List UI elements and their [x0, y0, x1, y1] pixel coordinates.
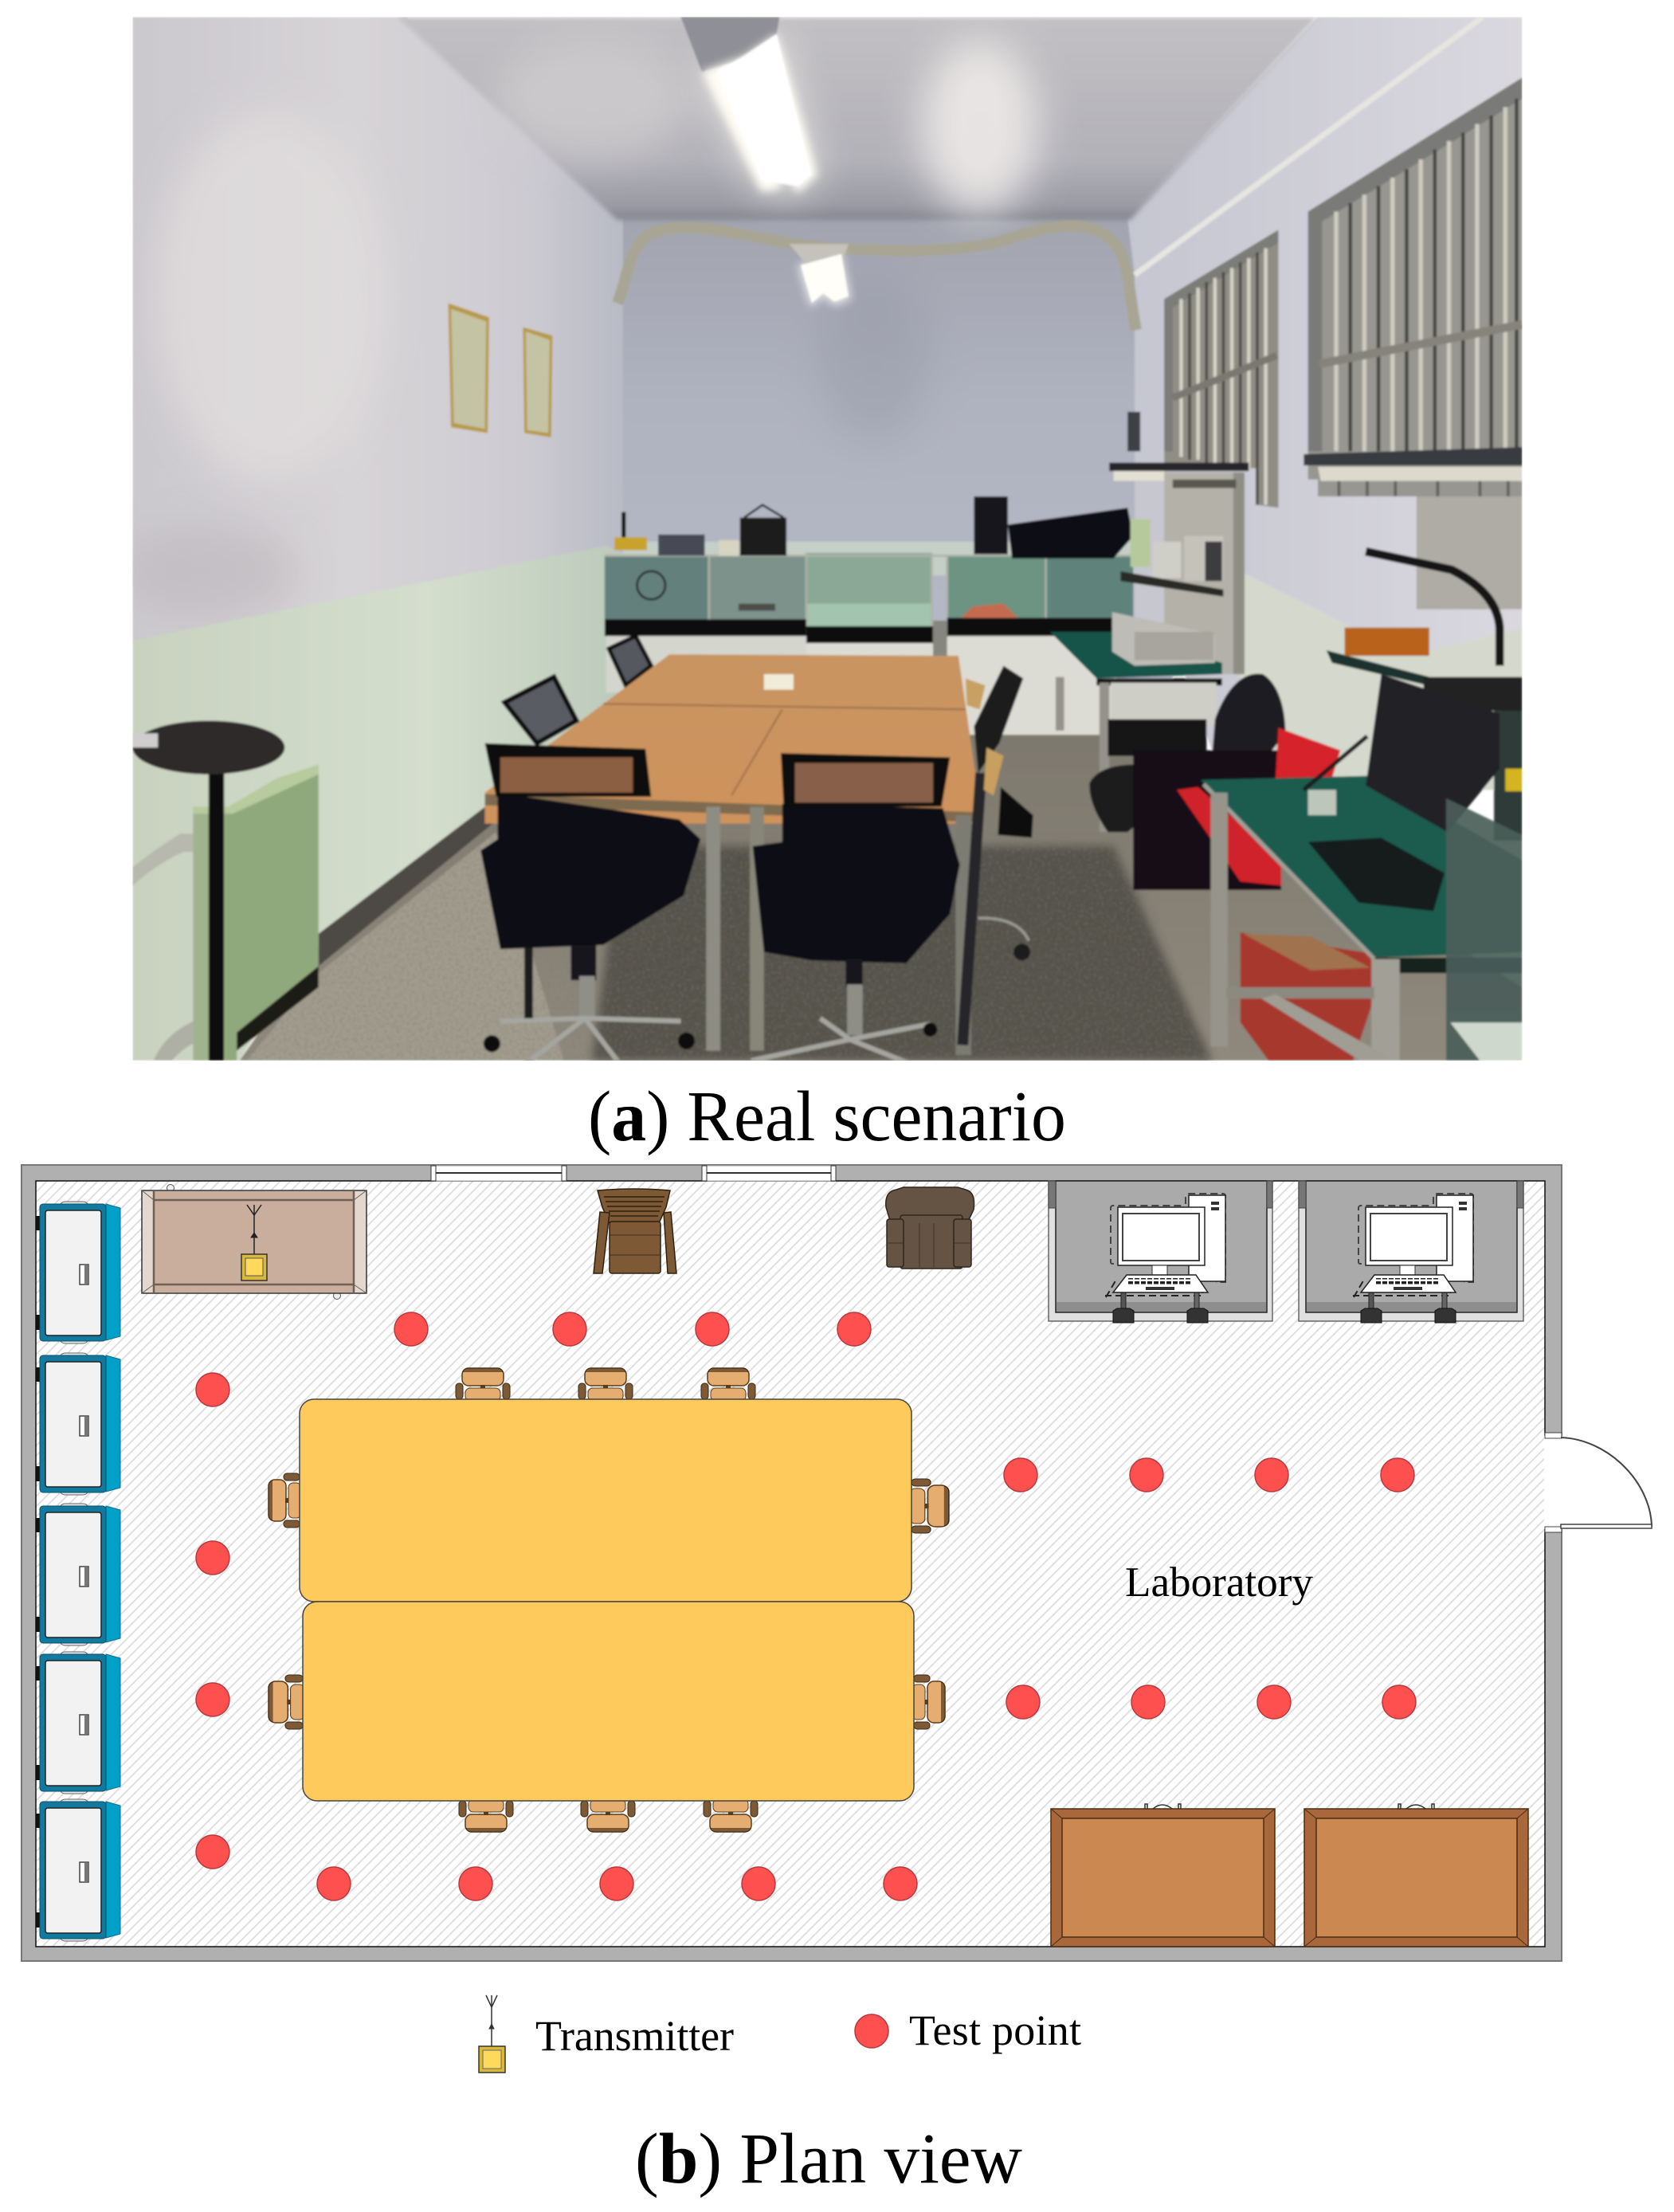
- conference table: [485, 654, 981, 1055]
- green radiator cover: [132, 764, 319, 1061]
- legend label: test point: Test point: [909, 2006, 1081, 2054]
- red chair and crate: [1177, 728, 1388, 1061]
- ceiling: [398, 17, 1318, 220]
- green workbench: [1201, 776, 1523, 1061]
- rack backdrop: [1135, 480, 1170, 663]
- glass case: [1446, 798, 1523, 1061]
- icon: transmitter: [241, 1205, 267, 1281]
- right side chair and backpack: [962, 665, 1033, 1045]
- shelf and orange device: [1327, 628, 1523, 841]
- round table: [132, 720, 284, 1061]
- fluorescent lamp near: [680, 17, 817, 193]
- computer desk 2: [1299, 1181, 1523, 1323]
- panel: plan view: [22, 1165, 1652, 1961]
- back wall: [614, 209, 1173, 694]
- brown table 1: [1051, 1804, 1275, 1947]
- back green desk: [1050, 612, 1222, 832]
- caption: plan view: (b) Plan view: [635, 2120, 1022, 2198]
- meeting chairs: [269, 1368, 949, 1832]
- caption: real scenario: (a) Real scenario: [588, 1077, 1066, 1156]
- legend icon: test point: [855, 2014, 888, 2048]
- front right chair: [751, 753, 960, 1066]
- baseboard: [319, 798, 496, 966]
- keyboard: [1308, 837, 1445, 911]
- transmitter table: [142, 1184, 367, 1299]
- front left chair: [480, 743, 700, 1066]
- rack and instruments: [1109, 463, 1249, 674]
- recliner: [886, 1187, 974, 1269]
- window 2: [1304, 77, 1523, 610]
- room walls: [22, 1165, 1562, 1961]
- left wall: [132, 17, 623, 643]
- test points: [196, 1312, 1416, 1900]
- pipe along right wall: [1135, 17, 1483, 275]
- wooden chair: [594, 1189, 676, 1273]
- legend label: transmitter: Transmitter: [535, 2012, 734, 2060]
- glass cabinets: [605, 553, 1136, 735]
- objects on cabinets: [614, 412, 1140, 559]
- door: [1544, 1433, 1652, 1532]
- legend: [479, 1995, 1081, 2073]
- floor: [240, 705, 1523, 1061]
- brown table 2: [1304, 1804, 1528, 1947]
- left wall green band: [132, 546, 623, 1061]
- cable trunking: [617, 226, 1136, 330]
- panel: real scenario photo: [127, 17, 1523, 1066]
- yellow part and cables: [1304, 736, 1523, 815]
- lamp: [1366, 551, 1500, 665]
- black armchair: [1089, 673, 1285, 890]
- fluorescent lamp far: [790, 244, 851, 308]
- right wall: [1127, 17, 1523, 790]
- legend icon: transmitter: [479, 1995, 505, 2073]
- storage cabinets: [36, 1202, 120, 1941]
- computer desk 1: [1049, 1181, 1272, 1323]
- floor speckle: [240, 832, 1212, 1061]
- meeting table top: [300, 1399, 911, 1602]
- meeting table bottom: [303, 1602, 914, 1801]
- monitor: [1366, 674, 1500, 832]
- window 1: [1164, 230, 1278, 508]
- room label: Laboratory: [1125, 1559, 1313, 1606]
- window openings: [431, 1166, 836, 1181]
- far chairs: [504, 636, 651, 743]
- framed pictures: [449, 304, 552, 437]
